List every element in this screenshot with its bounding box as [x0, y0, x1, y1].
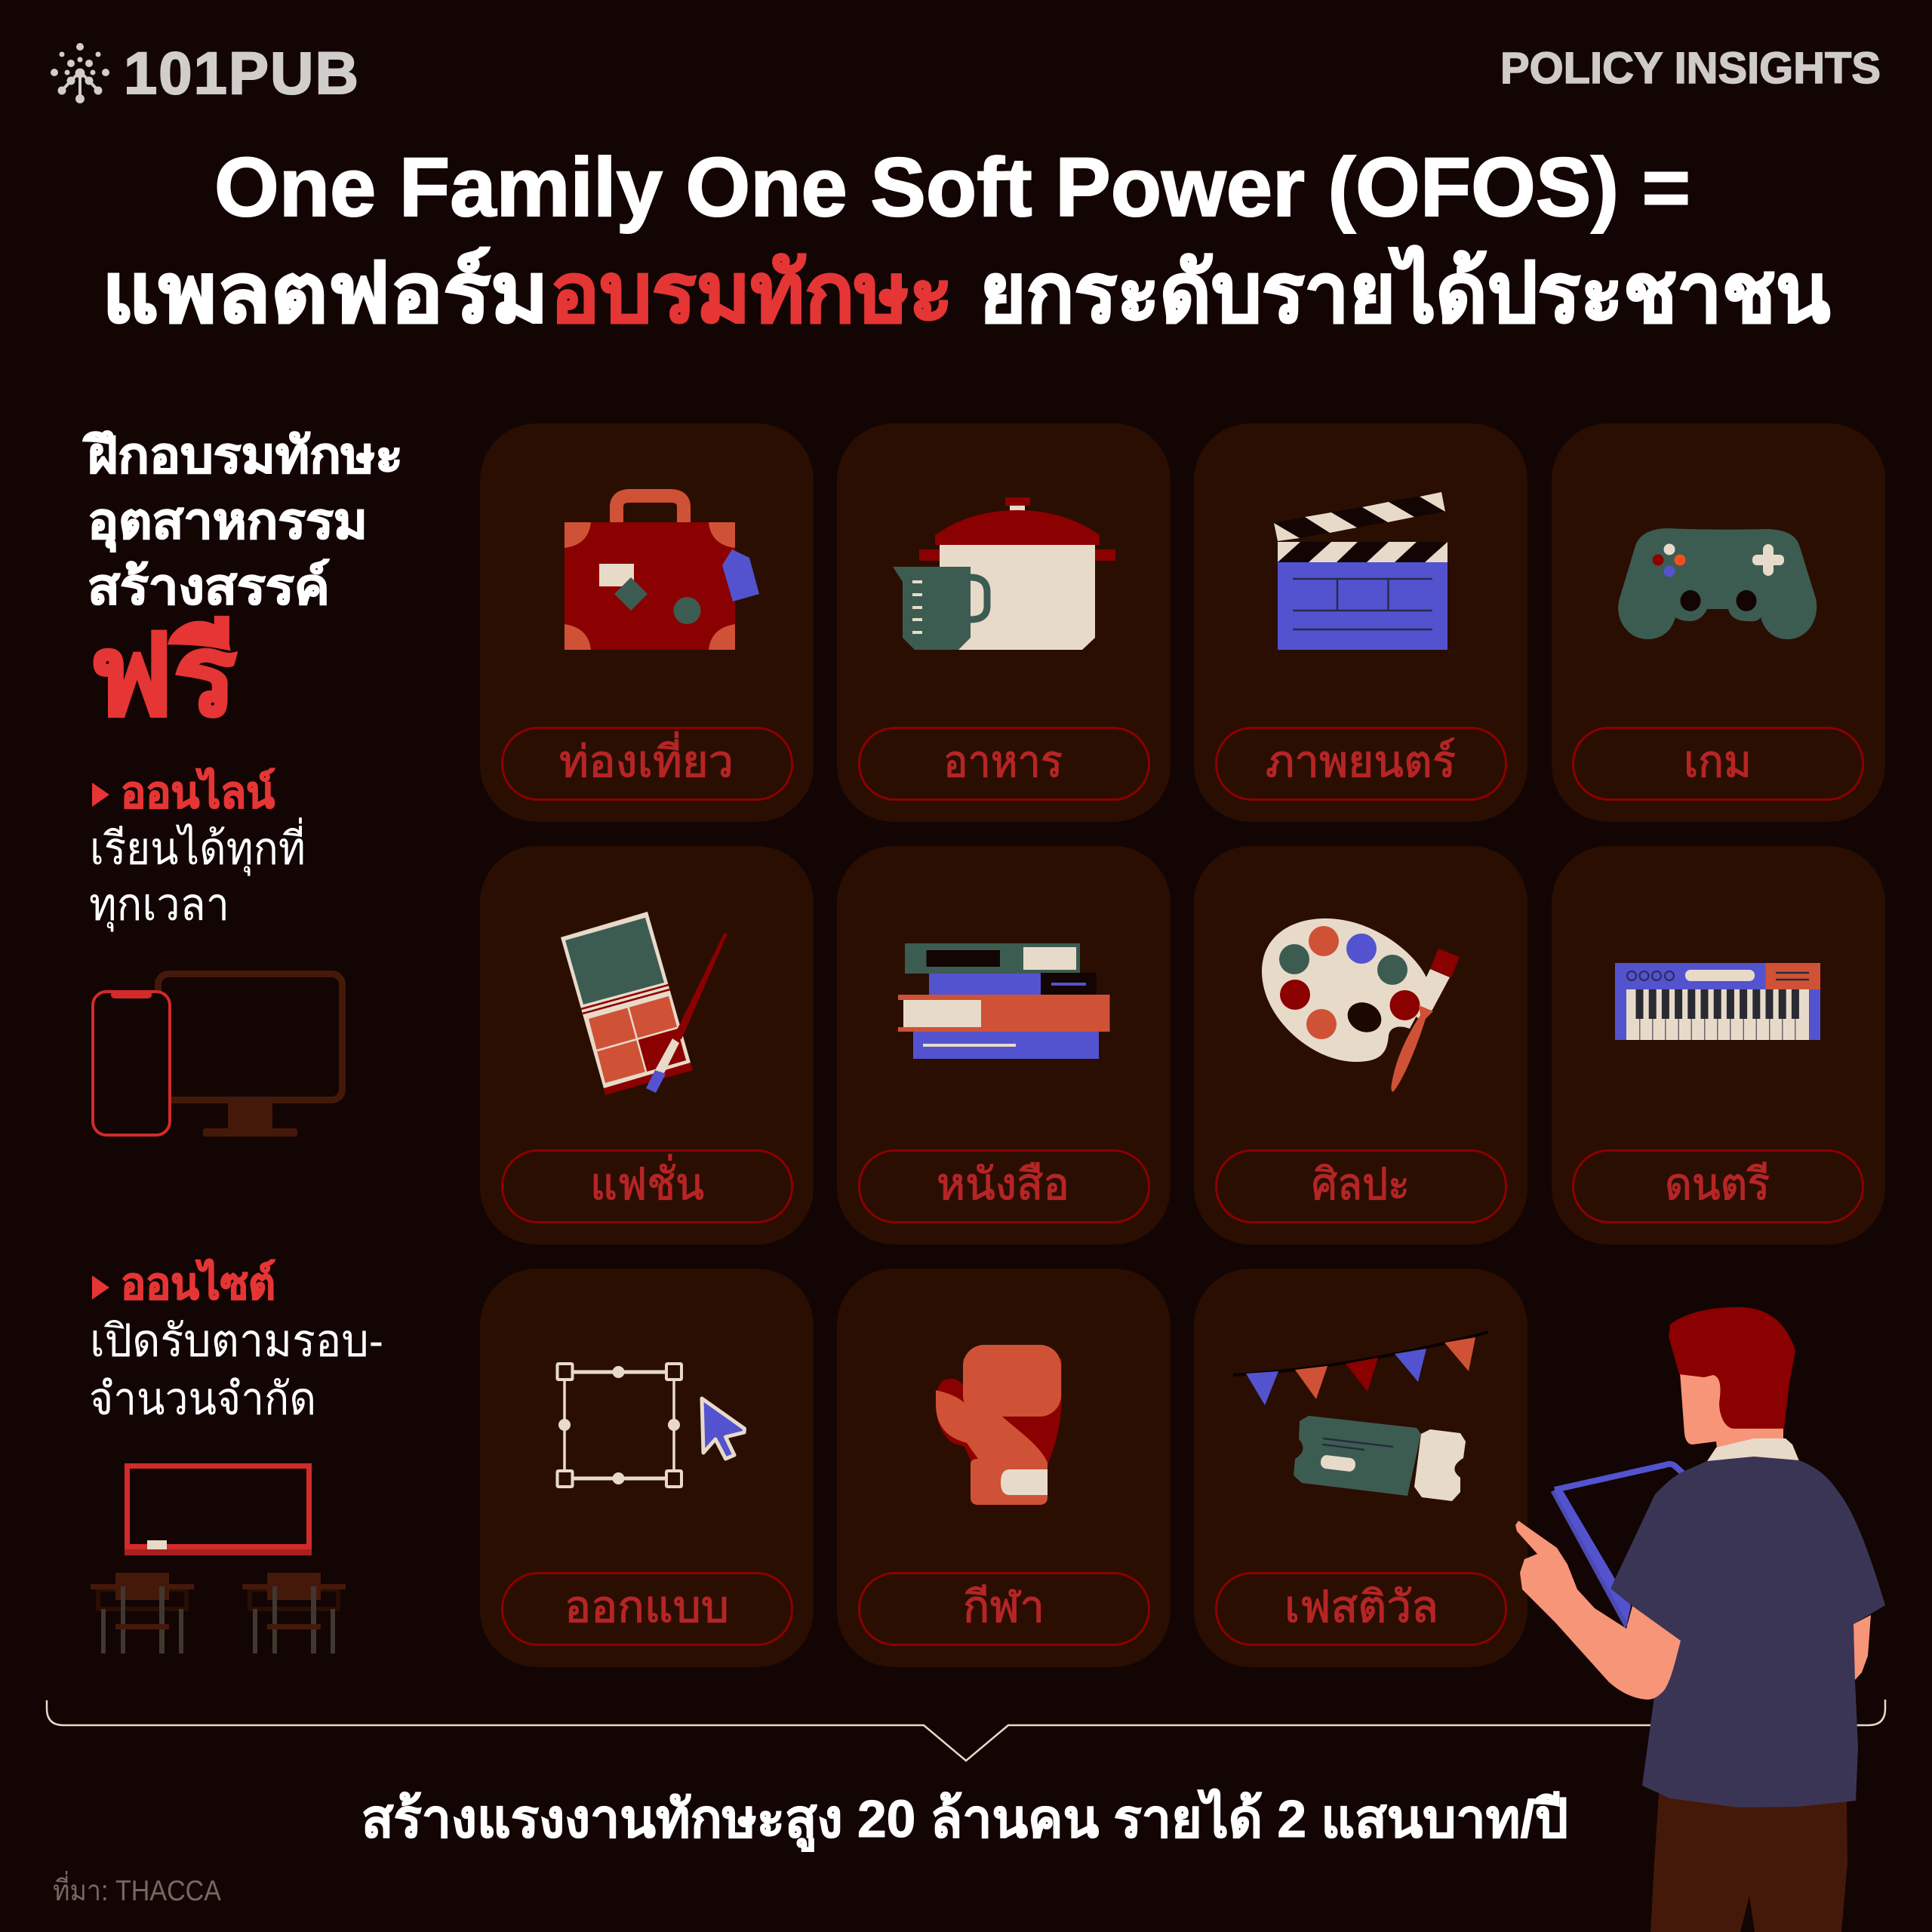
icon: logo network mark [51, 43, 109, 103]
label pill: books: หนังสือ [937, 1160, 1069, 1209]
card: festival [1194, 1269, 1527, 1667]
onsite description: จำนวนจำกัด [89, 1374, 316, 1424]
label pill: design [503, 1573, 792, 1645]
label pill: film: ภาพยนตร์ [1266, 737, 1456, 786]
label pill: art: ศิลปะ [1312, 1160, 1410, 1209]
online description [89, 817, 306, 932]
label pill: festival [1217, 1573, 1506, 1645]
onsite heading: ออนไซต์ [121, 1259, 275, 1309]
label pill: fashion [503, 1150, 792, 1223]
label pill: travel: ท่องเที่ยว [559, 731, 734, 786]
source: ที่มา: THACCA [53, 1871, 222, 1907]
collar [1707, 1438, 1799, 1461]
label pill: art [1217, 1150, 1506, 1223]
title line 2: อบรมทักษะ [550, 247, 953, 340]
card: design [480, 1269, 814, 1667]
label pill: festival: เฟสติวัล [1284, 1583, 1438, 1632]
label pill: design: ออกแบบ [565, 1583, 729, 1632]
illustration: person with tablet [1515, 1307, 1885, 1932]
icon: paint palette and brush [1262, 918, 1460, 1092]
icon: classroom [91, 1466, 346, 1654]
icon: selection box and cursor [557, 1364, 744, 1487]
icon: suitcase [565, 496, 759, 650]
label pill: food [859, 728, 1149, 800]
title line 1: One Family One Soft Power (OFOS) = [214, 141, 1690, 234]
card: books [837, 846, 1171, 1244]
icon: game controller [1618, 528, 1817, 639]
intro heading: สร้างสรรค์ [88, 558, 330, 614]
card: music [1552, 846, 1885, 1244]
intro heading [82, 427, 403, 614]
icon: boxing glove [936, 1345, 1062, 1505]
panel: online [89, 768, 343, 1137]
title line 2: ยกระดับรายได้ประชาชน [980, 246, 1830, 340]
logo wordmark: 101PUB [124, 39, 360, 106]
icon: book stack [898, 943, 1109, 1059]
online heading: ออนไลน์ [121, 768, 275, 817]
onsite description [89, 1315, 383, 1424]
title [102, 141, 1830, 340]
online description: เรียนได้ทุกที่ [90, 817, 306, 876]
far arm [1854, 1615, 1871, 1681]
trousers [1651, 1794, 1847, 1932]
logo: 101PUB [51, 39, 360, 106]
intro heading: ฝึกอบรมทักษะ [82, 427, 403, 483]
online description: ทุกเวลา [89, 879, 229, 932]
label pill: travel [503, 728, 792, 800]
icon: makeup palette and brush [561, 912, 728, 1095]
panel: onsite [89, 1259, 383, 1654]
free label: ฟรี [89, 612, 237, 739]
title line 2 [102, 246, 1830, 340]
bracket [47, 1700, 1885, 1761]
label pill: film [1217, 728, 1506, 800]
tablet [1551, 1464, 1684, 1628]
card: food [837, 423, 1171, 822]
label pill: music [1573, 1150, 1863, 1223]
card: travel [480, 423, 814, 822]
section tag: policy insights: POLICY INSIGHTS [1500, 44, 1881, 93]
icon: keyboard synthesizer [1615, 963, 1820, 1040]
label pill: fashion: แฟชั่น [590, 1154, 704, 1209]
label pill: books [859, 1150, 1149, 1223]
label pill: food: อาหาร [943, 737, 1063, 786]
shirt [1611, 1457, 1885, 1807]
card: film [1194, 423, 1527, 822]
card: game [1552, 423, 1885, 822]
pointing arm [1515, 1521, 1681, 1700]
arrow [92, 783, 109, 807]
title line 2: แพลตฟอร์ม [102, 247, 549, 340]
label pill: music: ดนตรี [1665, 1160, 1770, 1209]
icon: clapperboard [1274, 492, 1447, 650]
intro heading: อุตสาหกรรม [88, 493, 368, 552]
label pill: game: เกม [1684, 737, 1752, 786]
arrow [92, 1275, 109, 1300]
card: sports [837, 1269, 1171, 1667]
icon: pot and jug [893, 497, 1115, 650]
summary text: สร้างแรงงานทักษะสูง 20 ล้านคน รายได้ 2 แสนบาท/ปี [361, 1788, 1568, 1852]
icon: monitor and phone [93, 974, 343, 1137]
card: fashion [480, 846, 814, 1244]
onsite description: เปิดรับตามรอบ- [90, 1315, 383, 1366]
icon: bunting and ticket [1233, 1332, 1488, 1501]
label pill: game [1573, 728, 1863, 800]
card: art [1194, 846, 1527, 1244]
panel: free training intro [82, 427, 403, 739]
hair [1669, 1307, 1795, 1429]
head and neck [1679, 1362, 1783, 1448]
label pill: sports [859, 1573, 1149, 1645]
label pill: sports: กีฬา [963, 1583, 1044, 1632]
